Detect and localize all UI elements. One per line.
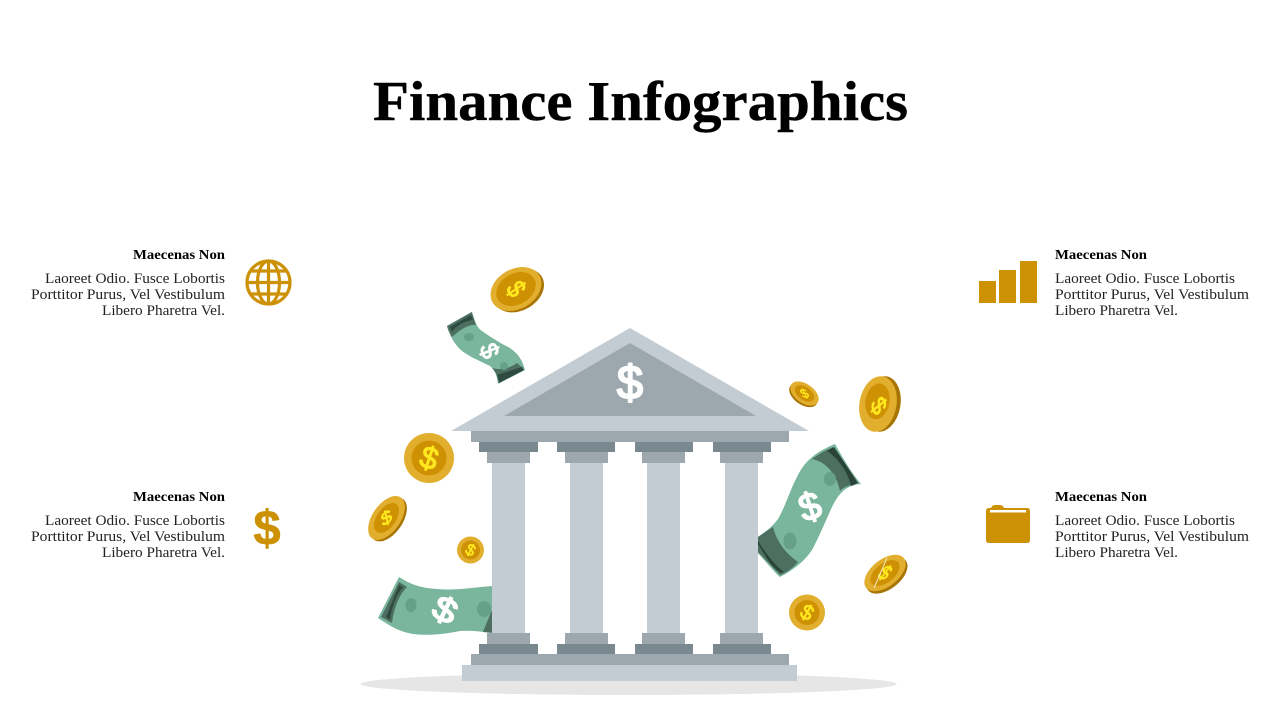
- coin: top: [483, 257, 552, 322]
- roof: [451, 328, 809, 431]
- text block: bottom right: Libero Pharetra Vel.: [1055, 545, 1178, 561]
- text block: bottom left: Laoreet Odio. Fusce Lobortis: [45, 513, 225, 529]
- text block: top right: Maecenas Non: [1055, 248, 1147, 263]
- banknote: bottom left: [378, 577, 510, 635]
- coin: flat left: [404, 433, 454, 483]
- dollar on note: $: [794, 484, 827, 531]
- text block: bottom left: Maecenas Non: [133, 490, 225, 505]
- text block: bottom right: Maecenas Non: [1055, 490, 1147, 505]
- icon: dollar sign: $: [253, 502, 281, 556]
- text block: top right: Laoreet Odio. Fusce Lobortis: [1055, 271, 1235, 287]
- text block: top right: Libero Pharetra Vel.: [1055, 303, 1178, 319]
- coin: upright right: [855, 373, 905, 435]
- text block: top right: [1055, 248, 1249, 319]
- coin: small left: $: [462, 541, 478, 560]
- coin: upright right: $: [865, 392, 891, 420]
- text block: bottom left: [31, 490, 225, 561]
- text block: bottom left: Libero Pharetra Vel.: [102, 545, 225, 561]
- entablature: [471, 431, 789, 442]
- column 2: [557, 442, 615, 654]
- coin: flat lower right: [789, 594, 825, 630]
- text block: bottom right: [1055, 490, 1249, 561]
- text block: bottom right: Porttitor Purus, Vel Vestibulum: [1055, 529, 1249, 545]
- icon: bar chart: [979, 261, 1037, 303]
- icon: globe: [247, 261, 290, 304]
- text block: bottom right: Laoreet Odio. Fusce Lobortis: [1055, 513, 1235, 529]
- text block: top left: [31, 248, 225, 319]
- column 4: [713, 442, 771, 654]
- text block: bottom left: Porttitor Purus, Vel Vestibulum: [31, 529, 225, 545]
- coin: tilted lower right: $: [873, 562, 897, 585]
- column 3: [635, 442, 693, 654]
- dollar on pediment: $: [617, 356, 643, 408]
- coin: top: $: [500, 276, 532, 303]
- title: Finance Infographics: [373, 71, 908, 133]
- coin highlight streak: [874, 558, 887, 588]
- banknote: right: [750, 444, 861, 577]
- coin: tilted left: [361, 489, 414, 548]
- coin: flat left: $: [416, 439, 443, 477]
- text block: top left: Porttitor Purus, Vel Vestibulum: [31, 287, 225, 303]
- banknote: top left: [447, 312, 525, 384]
- coin: small left: [457, 536, 484, 564]
- text block: top left: Laoreet Odio. Fusce Lobortis: [45, 271, 225, 287]
- column 1: [479, 442, 538, 654]
- coin: tilted left: $: [379, 505, 394, 531]
- coin: small top right: [785, 377, 823, 412]
- text block: top left: Libero Pharetra Vel.: [102, 303, 225, 319]
- bank building: [451, 328, 809, 681]
- dollar on note: $: [473, 339, 505, 363]
- base steps: [462, 654, 797, 681]
- coin: tilted lower right: [858, 548, 914, 601]
- text block: top left: Maecenas Non: [133, 248, 225, 263]
- coin: small top right: $: [797, 386, 812, 401]
- ground shadow: [360, 673, 896, 695]
- coin: flat lower right: $: [796, 600, 818, 626]
- text block: top right: Porttitor Purus, Vel Vestibulum: [1055, 287, 1249, 303]
- icon: folder: [986, 505, 1030, 543]
- roof inner pediment: [504, 343, 756, 416]
- dollar on note: $: [426, 588, 463, 633]
